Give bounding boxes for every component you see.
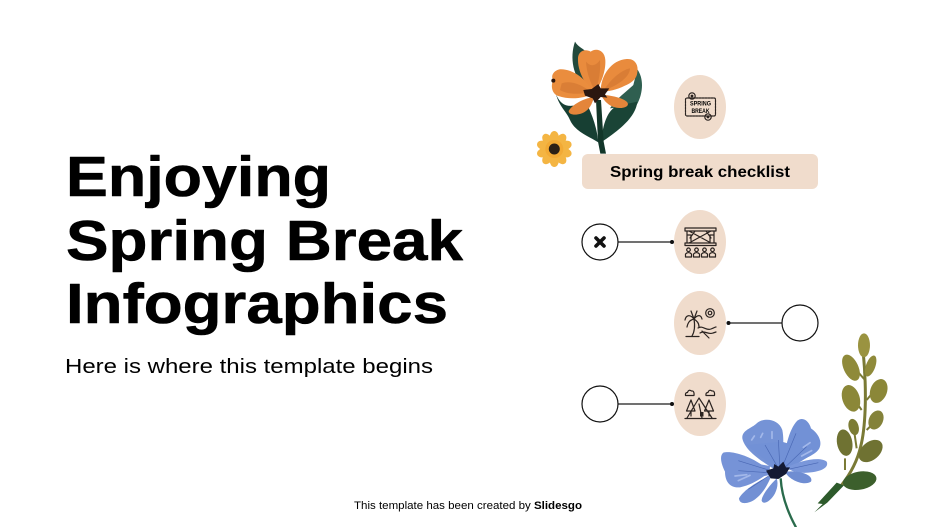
olive branch: [814, 333, 891, 512]
checklist heading bar: [582, 154, 818, 189]
oval badge: concert stage icon: [674, 210, 726, 274]
checklist row 1: checked circle and connector: [582, 224, 674, 260]
checklist row 2: empty circle and connector: [726, 305, 818, 341]
oval badge: camping tent icon: [674, 372, 726, 436]
oval badge: spring break icon: SPRING: [690, 100, 711, 108]
oval badge: palm beach icon: [674, 291, 726, 355]
checklist heading bar: Spring break checklist: [610, 164, 790, 181]
footer credit: This template has been created by Slidesgo: [354, 500, 582, 512]
title: Infographics: [66, 272, 448, 336]
oval badge: spring break icon: BREAK: [692, 108, 710, 115]
title: [66, 145, 463, 336]
small yellow flower: [536, 131, 573, 167]
blue flower: [721, 419, 827, 527]
subtitle: Here is where this template begins: [65, 356, 433, 378]
checklist row 3: empty circle and connector: [582, 386, 674, 422]
title: Enjoying: [66, 145, 331, 209]
title: Spring Break: [66, 209, 463, 273]
orange flower: [551, 42, 642, 154]
oval badge: spring break icon: [674, 75, 726, 139]
